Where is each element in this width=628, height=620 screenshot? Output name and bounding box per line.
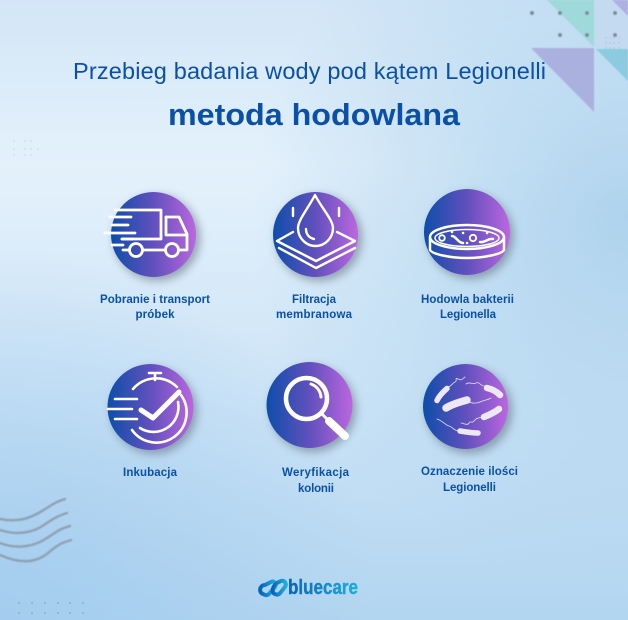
label: Oznaczenie ilości [421,466,518,478]
label: Legionelli [443,482,496,494]
decoration: dots bottom left [18,602,84,614]
step 4: incubation [108,364,197,479]
label: Weryfikacja [282,467,350,479]
label: Inkubacja [123,467,178,479]
logo: bluecare [260,577,358,599]
icon: petri dish [430,225,504,258]
step 5: colony verification [266,362,356,495]
step 1: sampling and transport [100,192,210,321]
icon: stopwatch with check [108,373,187,443]
title: Przebieg badania wody pod kątem Legionelli [73,58,546,84]
icon: magnifying glass [286,378,345,436]
icon: bacteria [437,377,500,433]
icon: drop on membrane layers [277,195,355,268]
label: Legionella [440,309,497,321]
logo: bluecare: bluecare [288,577,358,599]
label: Pobranie i transport [100,294,210,306]
label: membranowa [276,309,353,321]
label: Hodowla bakterii [421,294,514,306]
step 2: membrane filtration [273,192,362,321]
icon: truck [105,210,187,256]
decoration: waves bottom left [0,499,71,561]
label: próbek [136,309,175,321]
icon: logo mark [260,581,286,595]
decoration: top right triangles and dots [530,0,628,112]
step 3: bacteria culture [421,189,514,321]
subtitle: metoda hodowlana [168,97,461,132]
label: Filtracja [292,294,337,306]
decoration: faint dots left [13,140,39,156]
step 6: Legionella count [421,364,518,494]
label: kolonii [298,483,334,495]
